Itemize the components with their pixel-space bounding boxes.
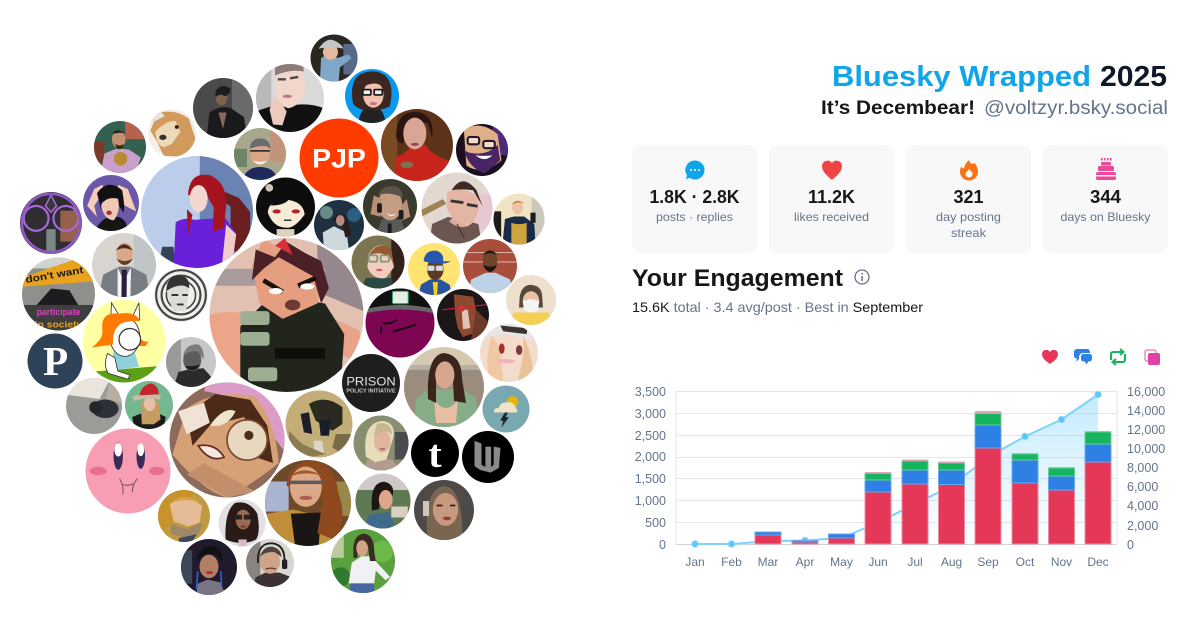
- month labels: May: [830, 555, 853, 569]
- avatar: woman in green dress: [404, 347, 484, 427]
- avatar: cartoon cat with orange hair: [82, 300, 166, 382]
- month labels: Mar: [758, 555, 778, 569]
- stat label line two: streak: [951, 226, 987, 240]
- stat value: 11.2K: [808, 187, 855, 207]
- avatar: meme participate in society: in society: [35, 320, 83, 331]
- right axis labels: 4,000: [1127, 499, 1158, 513]
- avatar: woman with raised hand: [256, 64, 324, 132]
- icon: legend replies: [1074, 349, 1092, 364]
- stat label: likes received: [794, 210, 869, 224]
- panel: days on Bluesky: [1043, 145, 1168, 253]
- bars: replies: [755, 425, 1111, 542]
- avatar: P logo: [28, 334, 82, 388]
- avatar: cartoon face with pink hat: [170, 382, 284, 498]
- month labels: Aug: [941, 555, 962, 569]
- avatar: selfie woman with glasses: [422, 172, 492, 244]
- avatar: camouflaged photo: [286, 390, 352, 458]
- month labels: Dec: [1087, 555, 1109, 569]
- left axis labels: 1,500: [635, 472, 666, 486]
- stat label: days on Bluesky: [1060, 210, 1150, 224]
- avatar: PJP logo: PJP: [312, 143, 366, 173]
- avatar: dark-haired woman close-up: [414, 480, 474, 540]
- left axis labels: 3,000: [635, 407, 666, 421]
- avatar: bitmoji woman: [345, 69, 399, 123]
- avatar: woman with curls and glasses: [218, 500, 266, 546]
- right axis labels: 2,000: [1127, 519, 1158, 533]
- left axis labels: 2,500: [635, 429, 666, 443]
- left axis labels: 1,000: [635, 494, 666, 508]
- avatar: spiral sketched face: [154, 268, 208, 322]
- avatar: Prison Policy Initiative logo: PRISON: [346, 375, 396, 388]
- stat value: 321: [954, 187, 984, 207]
- avatar: golden dog: [148, 109, 196, 157]
- icon: cake: [1096, 158, 1116, 180]
- avatar: woman in gold gown: [494, 194, 544, 244]
- left axis labels: 3,500: [635, 385, 666, 399]
- panel: day posting streak: [906, 145, 1031, 253]
- left axis labels: 2,000: [635, 450, 666, 464]
- engagement summary: 15.6K total · 3.4 avg/post · Best in September: [632, 299, 923, 315]
- month labels: Apr: [796, 555, 814, 569]
- avatar: woman with blue earrings: [181, 539, 237, 595]
- panel: posts and replies: [632, 145, 757, 253]
- avatar: auburn-haired woman with glasses: [265, 460, 351, 546]
- chart legend: [1042, 349, 1160, 365]
- avatar: W logo: [462, 431, 514, 483]
- stat value: 344: [1090, 187, 1121, 207]
- avatar: magenta hat character: [366, 288, 434, 358]
- icon: legend quotes: [1145, 350, 1160, 365]
- avatar: man on two phones: [363, 179, 417, 233]
- month labels: Oct: [1016, 555, 1035, 569]
- avatar: blonde woman in scarf: [158, 490, 210, 542]
- left axis labels: 500: [645, 516, 666, 530]
- avatar: Kirby: [86, 428, 170, 514]
- avatar: blonde selfie woman: [354, 416, 408, 470]
- avatar: greyscale man with beanie: [166, 337, 216, 387]
- month labels: Jul: [907, 555, 923, 569]
- avatar: black cat on carpet: [66, 378, 122, 434]
- avatar: man with burger: [94, 121, 146, 173]
- avatar: woman in dim forest: [314, 200, 364, 250]
- avatar: woman with green glasses: [352, 236, 404, 288]
- avatar: smiling man with glasses: [234, 128, 286, 180]
- icon: legend heart: [1042, 350, 1058, 364]
- avatar: man with headphones: [246, 539, 294, 587]
- avatar: PJP logo: [300, 118, 378, 198]
- stat label: posts · replies: [656, 210, 733, 224]
- right axis labels: [1127, 385, 1165, 552]
- avatar: meme participate in society: participate: [37, 307, 80, 318]
- right axis labels: 10,000: [1127, 442, 1165, 456]
- avatar: horse with laser eyes: [437, 289, 489, 341]
- bars: quotes: [865, 411, 1111, 474]
- avatar: man in grey suit: [92, 233, 156, 297]
- avatar: woman in denim jacket: [356, 474, 410, 528]
- icon: chat bubble: [685, 160, 705, 180]
- month labels: [685, 555, 1109, 569]
- month labels: Jun: [868, 555, 888, 569]
- stat value: 1.8K · 2.8K: [650, 187, 740, 207]
- left axis labels: [635, 385, 666, 552]
- avatar: Tumblr-style t logo: [411, 429, 459, 477]
- avatar: Prison Policy Initiative logo: POLICY INITIATIVE: [346, 388, 396, 394]
- avatar: Prison Policy Initiative logo: [342, 354, 400, 412]
- avatar: meme participate in society: don't want: [25, 265, 85, 286]
- avatar cluster: [20, 34, 556, 595]
- avatar: anime girl with black hair: [256, 178, 315, 238]
- month labels: Nov: [1051, 555, 1072, 569]
- header: [821, 61, 1168, 119]
- icon: legend reposts: [1111, 349, 1125, 365]
- avatar: meme participate in society: [22, 258, 95, 331]
- avatar: cartoon man in blue hat: [408, 243, 460, 295]
- avatar: large anime bear character: [210, 238, 364, 392]
- left axis labels: 0: [659, 538, 666, 552]
- right axis labels: 8,000: [1127, 461, 1158, 475]
- stat label: day posting: [936, 210, 1001, 224]
- avatar: red-haired woman in purple: [141, 156, 253, 268]
- panel: likes received: [769, 145, 894, 253]
- title: 2025: [1100, 61, 1167, 93]
- avatar: purple-toned bearded man: [456, 124, 508, 176]
- right axis labels: 0: [1127, 538, 1134, 552]
- avatar: woman in Santa hat: [125, 381, 173, 429]
- subtitle: It’s Decembear!: [821, 98, 975, 119]
- avatar: Tumblr-style t logo: t: [428, 432, 442, 476]
- month labels: Feb: [721, 555, 742, 569]
- line markers: [692, 391, 1101, 547]
- heading: Your Engagement: Your Engagement: [632, 265, 843, 292]
- icon: flame: [960, 160, 978, 180]
- avatar: child with hat: [310, 34, 358, 82]
- month labels: Jan: [685, 555, 705, 569]
- avatar: person in black suit: [193, 78, 253, 138]
- avatar: woman in garden: [331, 529, 395, 593]
- icon: info: [855, 270, 869, 284]
- avatar: anime girl with white cap: [480, 324, 538, 382]
- cumulative area: [695, 394, 1098, 544]
- bars: reposts: [865, 414, 1111, 480]
- avatar: man by brick wall: [463, 239, 517, 293]
- avatar: rebel logo over photo: [20, 192, 82, 254]
- avatar: cartoon person on purple: [83, 175, 139, 231]
- avatar: P logo: P: [43, 338, 68, 384]
- icon: heart: [822, 161, 842, 180]
- right axis labels: 16,000: [1127, 385, 1165, 399]
- subtitle: @voltzyr.bsky.social: [984, 98, 1168, 119]
- bars: likes: [755, 448, 1111, 544]
- right axis labels: 12,000: [1127, 423, 1165, 437]
- right axis labels: 14,000: [1127, 404, 1165, 418]
- avatar: woman in red sweater: [381, 109, 453, 181]
- title: Bluesky Wrapped: [832, 61, 1091, 93]
- cumulative line: [695, 394, 1098, 544]
- avatar: woman in mask and yellow: [506, 275, 556, 325]
- month labels: Sep: [977, 555, 999, 569]
- stacked bar chart: [635, 385, 1165, 569]
- right axis labels: 6,000: [1127, 480, 1158, 494]
- avatar: weather icon: [482, 386, 530, 432]
